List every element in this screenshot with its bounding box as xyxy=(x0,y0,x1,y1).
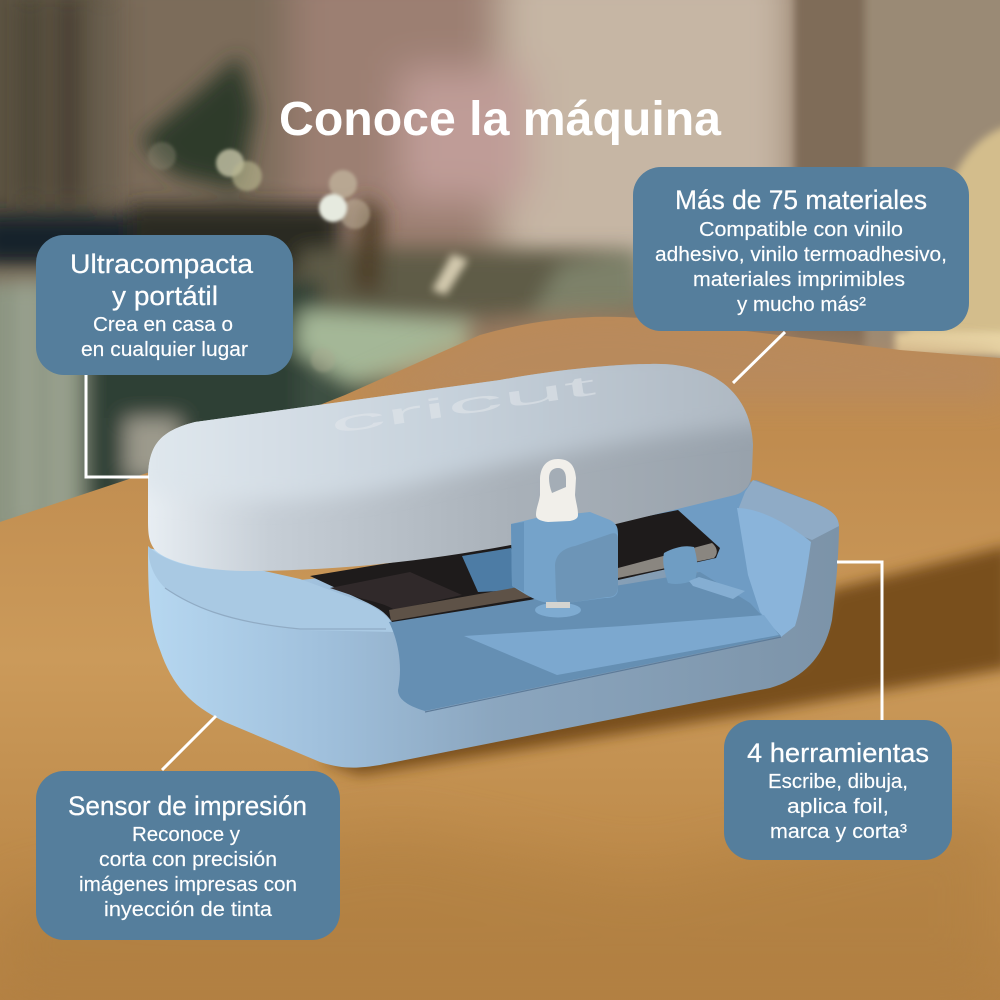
machine shadow on table xyxy=(320,545,1000,775)
panel: sensor de impresión: imágenes impresas con xyxy=(79,873,297,896)
connector lines xyxy=(86,332,882,770)
round lamp xyxy=(895,125,1000,358)
panel: herramientas: aplica foil, xyxy=(787,795,889,818)
table surface xyxy=(0,317,1000,1000)
panel: ultracompacta: Ultracompacta xyxy=(70,249,254,279)
panel: sensor de impresión: Reconoce y xyxy=(132,823,241,846)
panel: sensor de impresión: corta con precisión xyxy=(99,848,277,871)
white tool knob xyxy=(536,459,578,522)
logo on lid: cricut xyxy=(328,369,598,440)
panel: materiales xyxy=(633,167,969,331)
panel: herramientas: 4 herramientas xyxy=(747,738,929,768)
panel: ultracompacta: Crea en casa o xyxy=(93,313,233,336)
panel: ultracompacta: y portátil xyxy=(112,281,218,311)
machine xyxy=(140,350,839,768)
paper slot interior xyxy=(310,510,720,622)
panel: materiales: materiales imprimibles xyxy=(693,268,905,291)
roller xyxy=(663,546,697,584)
panel: materiales: Compatible con vinilo xyxy=(699,218,903,241)
carriage xyxy=(511,459,618,618)
lid xyxy=(148,364,753,571)
rear wall and right wing xyxy=(650,488,782,637)
panel: herramientas: marca y corta³ xyxy=(770,820,907,843)
title: Conoce la máquina xyxy=(279,93,721,146)
machine base xyxy=(148,480,839,768)
roller clip xyxy=(689,577,745,599)
panel: materiales: adhesivo, vinilo termoadhesivo, xyxy=(655,243,947,266)
panel: ultracompacta xyxy=(36,235,293,375)
panel: herramientas xyxy=(724,720,952,860)
panel: materiales: Más de 75 materiales xyxy=(675,185,927,215)
deck xyxy=(389,572,781,711)
sunlit patch on deck xyxy=(464,615,779,675)
steel rod xyxy=(389,543,717,621)
front lip line xyxy=(425,637,781,712)
panel: herramientas: Escribe, dibuja, xyxy=(768,770,908,793)
bokeh lights xyxy=(148,142,370,372)
washer xyxy=(535,602,581,618)
background: blurred room xyxy=(0,0,1000,540)
panel: sensor de impresión: Sensor de impresión xyxy=(68,791,307,821)
panel: sensor de impresión xyxy=(36,771,340,940)
panel: materiales: y mucho más² xyxy=(737,293,866,316)
panel: ultracompacta: en cualquier lugar xyxy=(81,338,248,361)
left wing xyxy=(148,546,396,632)
panel: sensor de impresión: inyección de tinta xyxy=(104,898,273,921)
